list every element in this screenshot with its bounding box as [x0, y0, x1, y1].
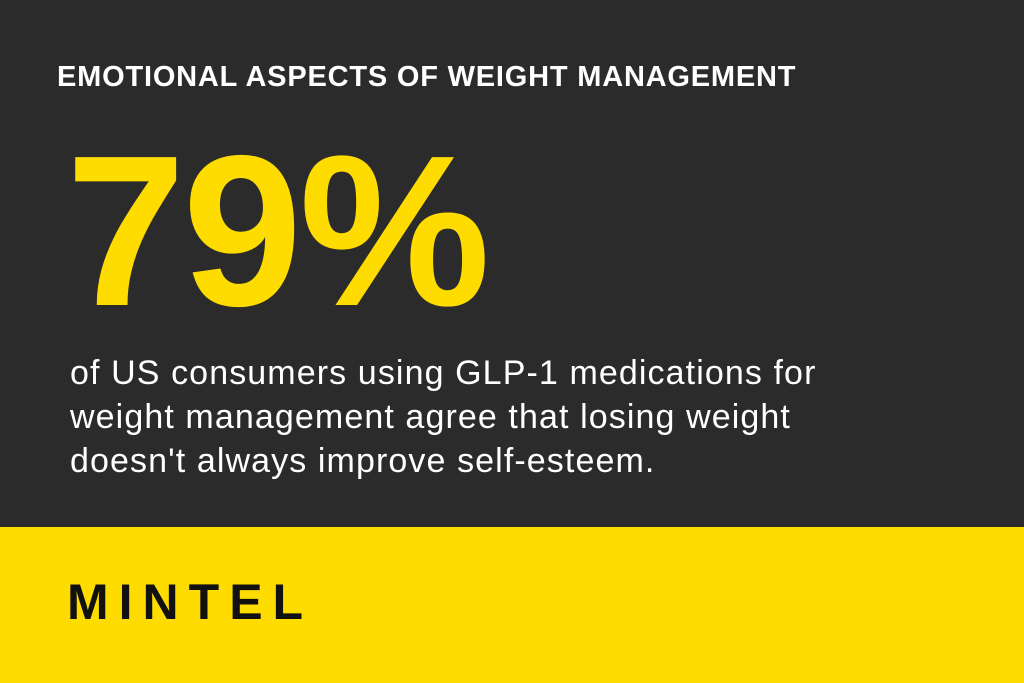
body text: of US consumers using GLP-1 medications for	[70, 354, 816, 392]
big statistic: 79%	[66, 110, 487, 351]
body text: doesn't always improve self-esteem.	[70, 442, 655, 480]
title: EMOTIONAL ASPECTS OF WEIGHT MANAGEMENT	[57, 61, 796, 93]
footer band	[0, 527, 1024, 683]
body text	[70, 354, 816, 480]
body text: weight management agree that losing weight	[70, 398, 791, 436]
logo: MINTEL: MINTEL	[67, 574, 313, 630]
